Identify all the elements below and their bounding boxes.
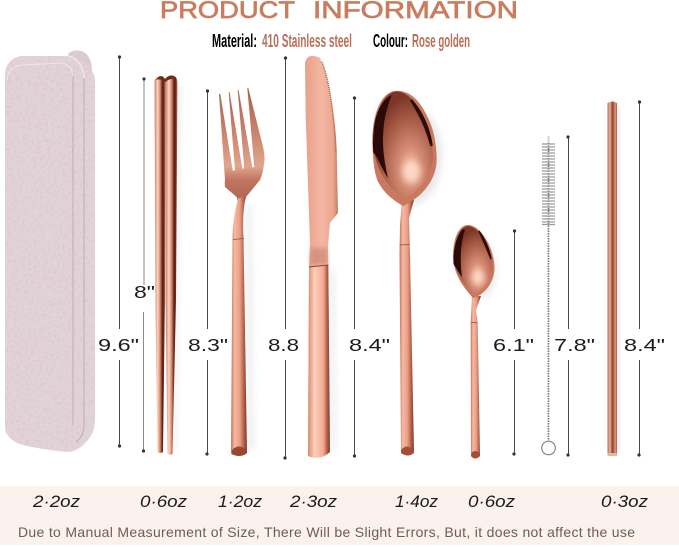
dimension lines (118, 55, 641, 460)
fork (219, 88, 265, 456)
material and colour line: Rose golden (412, 31, 470, 51)
length labels: 8.4" (624, 335, 665, 355)
weight labels (32, 492, 649, 511)
length labels: 6.1" (493, 335, 534, 355)
chopsticks (154, 75, 181, 455)
length labels: 8.8 (268, 335, 299, 355)
material and colour line: Colour: (373, 31, 408, 51)
material and colour line (212, 31, 470, 51)
footnote: Due to Manual Measurement of Size, There Will be Slight Errors, But, it does not affect the use (18, 524, 635, 540)
bottom band (0, 486, 679, 545)
length labels: 8.4" (349, 335, 390, 355)
weight labels: 2·3oz (289, 492, 338, 511)
weight labels: 0·6oz (468, 492, 516, 511)
length labels (98, 282, 665, 355)
length labels: 8" (134, 282, 155, 302)
weight labels: 1·2oz (218, 492, 263, 511)
large spoon (372, 91, 442, 455)
small spoon (453, 225, 496, 458)
straw cleaning brush (542, 136, 555, 455)
weight labels: 0·3oz (601, 492, 649, 511)
knife (305, 56, 338, 458)
weight labels: 0·6oz (140, 492, 188, 511)
weight labels: 2·2oz (32, 492, 81, 511)
straw (608, 102, 619, 456)
material and colour line: Material: (212, 31, 257, 51)
length labels: 7.8" (554, 335, 595, 355)
title (160, 0, 518, 24)
material and colour line: 410 Stainless steel (262, 31, 352, 51)
storage case (5, 50, 95, 452)
length labels: 8.3" (188, 335, 228, 355)
weight labels: 1·4oz (395, 492, 438, 511)
length labels: 9.6" (98, 335, 139, 355)
